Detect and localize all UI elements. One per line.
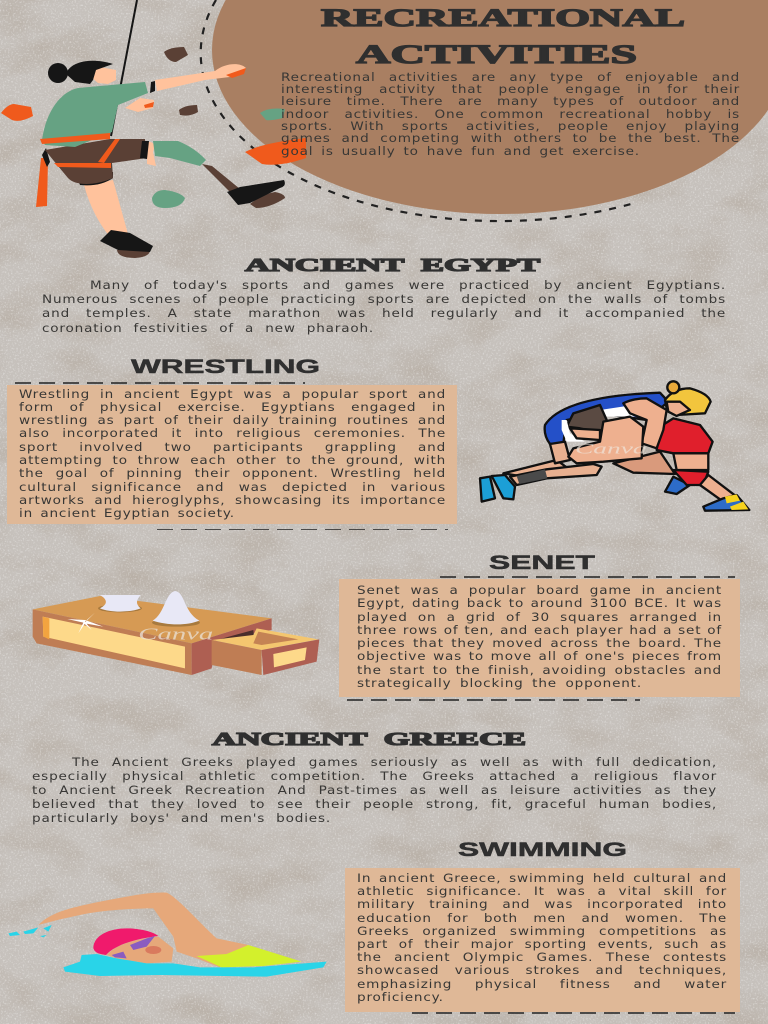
swimming text: showcased various strokes and techniques, (357, 963, 727, 977)
senet text: pieces that they moved across the board. The (357, 636, 722, 650)
title: ACTIVITIES (356, 40, 637, 69)
title (320, 5, 685, 69)
panel: senet (339, 579, 740, 697)
swimming text: emphasizing physical fitness and water (357, 977, 727, 991)
hero panel: brown ellipse (200, 0, 768, 222)
swimming text: proficiency. (357, 990, 444, 1004)
wrestling text: also incorporated it into religious ceremonies. The (19, 426, 446, 440)
wrestling text: the goal of pinning their opponent. Wrestling held (19, 466, 446, 480)
wrestling text: sport involved two participants grappling and (19, 440, 446, 454)
wrestling text: wrestling as part of their daily training routines and (19, 413, 446, 427)
heading: swimming: SWIMMING (458, 840, 627, 861)
senet text: Egypt, dating back to around 3100 BCE. It was (357, 596, 722, 610)
intro text: games and competing with others to be the best. The (281, 131, 740, 145)
senet text: three rows of ten, and each player had a set of (357, 623, 722, 637)
intro text: sports. With sports activities, people enjoy playing (281, 119, 740, 133)
ancient greece text: The Ancient Greeks played games seriously as well as with full dedication, (72, 755, 717, 769)
illustration: rock climber (1, 0, 306, 258)
swimming text: part of their major sporting events, such as (357, 937, 727, 951)
wrestling text: artworks and hieroglyphs, showcasing its importance (19, 493, 446, 507)
senet text: strategically blocking the opponent. (357, 676, 642, 690)
wrestling text: in ancient Egyptian society. (19, 506, 235, 520)
intro text: indoor activities. One common recreational hobby is (281, 107, 740, 121)
ancient egypt text: and temples. A state marathon was held regularly and it accompanied the (42, 306, 726, 320)
ancient greece text (32, 755, 717, 825)
heading: senet: SENET (489, 553, 596, 574)
swimming text: athletic significance. It was a vital skill for (357, 884, 727, 898)
ancient egypt text: Numerous scenes of people practicing sports are depicted on the walls of tombs (42, 292, 726, 306)
ancient egypt text: Many of today's sports and games were practiced by ancient Egyptians. (90, 278, 726, 292)
illustration: wrestlers (157, 380, 750, 530)
senet text: Senet was a popular board game in ancient (357, 583, 722, 597)
swimming text: military training and was incorporated into (357, 897, 727, 911)
panel: wrestling (7, 385, 457, 524)
wrestling text (19, 386, 446, 520)
ancient greece text: especially physical athletic competition. The Greeks attached a religious flavor (32, 769, 717, 783)
swimming text: the ancient Olympic Games. These contests (357, 950, 727, 964)
ancient greece text: believed that they loved to see their people strong, fit, graceful human bodies, (32, 797, 717, 811)
intro text: goal is usually to have fun and get exercise. (281, 144, 640, 158)
swimming text: education for both men and women. The (357, 911, 727, 925)
wrestling text: form of physical exercise. Egyptians engaged in (19, 400, 446, 414)
illustration: senet board: Canva (138, 624, 213, 643)
illustration: wrestlers: Canva (575, 441, 647, 457)
wrestling text: cultural significance and was depicted in various (19, 480, 446, 494)
senet text: the start to the finish, avoiding obstacles and (357, 662, 722, 676)
swimming text (357, 871, 727, 1004)
senet text: played on a grid of 30 squares arranged in (357, 610, 722, 624)
ancient greece text: to Ancient Greek Recreation And Past-times as well as leisure activities as they (32, 783, 717, 797)
heading: ancient greece: ANCIENT GREECE (212, 729, 526, 749)
title: RECREATIONAL (321, 5, 685, 32)
swimming text: In ancient Greece, swimming held cultural and (357, 871, 727, 885)
ancient greece text: particularly boys' and men's bodies. (32, 811, 331, 825)
illustration: senet board (32, 591, 640, 701)
panel: swimming (345, 868, 740, 1012)
heading: ancient egypt: ANCIENT EGYPT (245, 255, 540, 275)
senet text: objective was to move all of one's pieces from (357, 649, 722, 663)
ancient egypt text: coronation festivities of a new pharaoh. (42, 321, 374, 335)
intro text: leisure time. There are many types of outdoor and (281, 94, 740, 108)
wrestling text: attempting to throw each other to the ground, with (19, 453, 446, 467)
intro text (281, 70, 740, 158)
intro text: interesting activity that people engage in for their (281, 82, 740, 96)
senet text (357, 583, 722, 690)
swimming text: Greeks organized swimming competitions as (357, 924, 727, 938)
heading: wrestling: WRESTLING (131, 357, 320, 378)
wrestling text: Wrestling in ancient Egypt was a popular sport and (19, 386, 446, 400)
intro text: Recreational activities are any type of enjoyable and (281, 70, 740, 84)
ancient egypt text (42, 278, 726, 335)
